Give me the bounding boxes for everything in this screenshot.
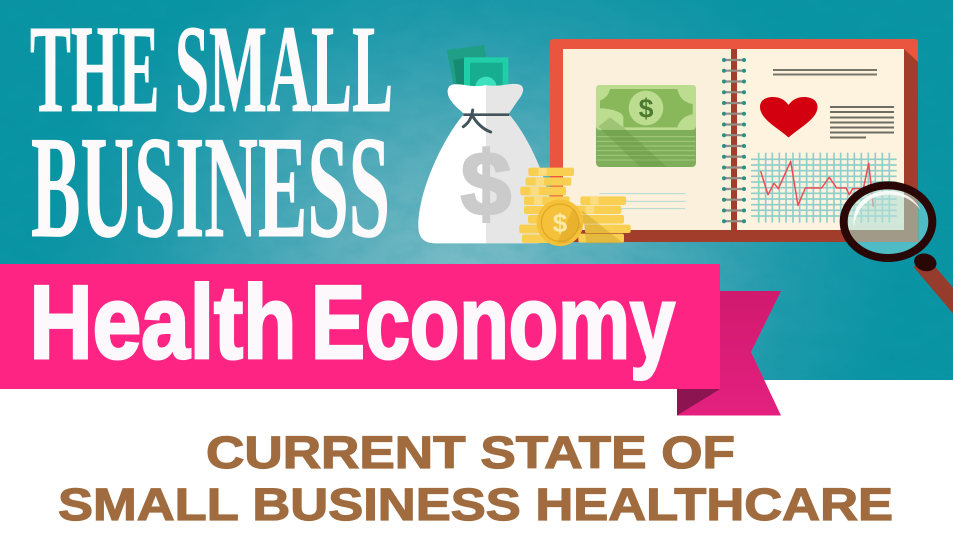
title: Health Economy: Economy bbox=[311, 265, 675, 381]
icon: magnifying glass bbox=[840, 180, 953, 317]
icon: money bag with banknotes: $ bbox=[461, 135, 511, 235]
icon: red heart bbox=[760, 97, 818, 138]
chart: ECG line on grid bbox=[751, 153, 897, 223]
icon: gold coin stacks bbox=[519, 168, 631, 246]
icon: money bag with banknotes bbox=[418, 45, 553, 243]
title: Health Economy: Health bbox=[30, 265, 296, 381]
teal textured background bbox=[0, 0, 953, 380]
title: The Small Business bbox=[30, 1, 393, 268]
text: THE SMALL bbox=[30, 1, 393, 139]
icon: spiral binding rings bbox=[724, 60, 744, 222]
icon: stack of cash card bbox=[596, 85, 696, 209]
text lines: page body bbox=[830, 106, 894, 138]
panel: open notebook bbox=[550, 39, 918, 242]
pink ribbon banner bbox=[0, 264, 720, 389]
subtitle: current state of small business healthcare bbox=[58, 427, 893, 530]
subtitle: current state of small business healthcare: CURRENT STATE OF bbox=[206, 427, 735, 478]
subtitle: current state of small business healthcare: SMALL BUSINESS HEALTHCARE bbox=[58, 479, 893, 530]
ribbon tail bbox=[677, 291, 781, 416]
text lines: page heading bbox=[773, 69, 877, 76]
title: The Small Business: BUSINESS bbox=[31, 106, 390, 268]
icon: stack of cash card: $ bbox=[639, 93, 654, 123]
icon: gold coin stacks: $ bbox=[553, 208, 568, 238]
title: Health Economy bbox=[30, 265, 675, 381]
